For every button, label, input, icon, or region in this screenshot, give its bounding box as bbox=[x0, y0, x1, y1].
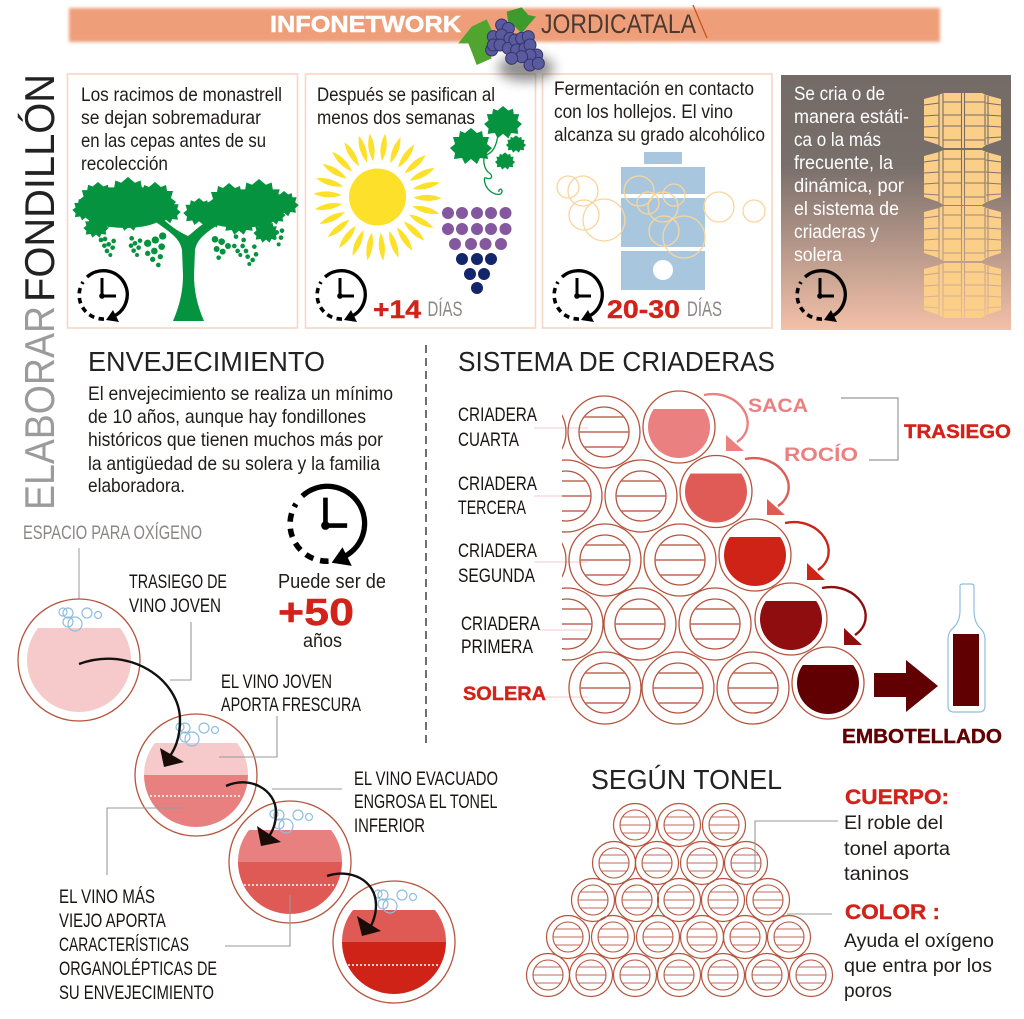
connector lines bbox=[107, 622, 342, 946]
panel: pasificado bbox=[306, 74, 536, 328]
title: Elaborar Fondillón: FONDILLÓN bbox=[16, 74, 63, 302]
labels: criaderas: CRIADERA bbox=[458, 405, 537, 426]
text: racimos: en las cepas antes de su bbox=[81, 130, 266, 152]
labels: saca, rocío bbox=[748, 396, 858, 466]
callout: cuerpo: taninos bbox=[844, 863, 909, 885]
arrow: barrel 3 to 4 bbox=[327, 874, 381, 936]
icon: sun bbox=[313, 133, 442, 261]
label: embotellado: EMBOTELLADO bbox=[842, 726, 1002, 748]
text: fermentación: alcanza su grado alcohólico bbox=[554, 124, 765, 146]
barrel 3 bbox=[229, 801, 351, 923]
text: crianza: dinámica, por bbox=[794, 175, 904, 197]
diagram: trasiego de tonel a tonel bbox=[18, 523, 503, 1004]
section: envejecimiento bbox=[88, 346, 398, 652]
value: +14 días bbox=[373, 296, 462, 324]
value: +14 días: DÍAS bbox=[428, 298, 462, 321]
arrow: saca 1 bbox=[704, 394, 748, 451]
section: según tonel bbox=[526, 764, 999, 1002]
callout: cuerpo: CUERPO: bbox=[845, 786, 949, 809]
brand: InfoNetwork: INFONETWORK bbox=[270, 11, 461, 37]
text: fermentación: Fermentación en contacto bbox=[554, 78, 754, 100]
text: envejecimiento: de 10 años, aunque hay fondillones bbox=[88, 406, 366, 428]
text: envejecimiento: históricos que tienen muchos más por bbox=[88, 429, 383, 451]
empty barrels bbox=[562, 395, 790, 725]
label: vino evacuado: INFERIOR bbox=[354, 816, 425, 837]
wine-filled barrels bbox=[643, 391, 864, 719]
label: vino joven frescura: EL VINO JOVEN bbox=[221, 672, 332, 693]
labels: saca, rocío: SACA bbox=[748, 396, 808, 417]
labels: criaderas: TERCERA bbox=[458, 498, 526, 519]
text: puede ser de +50 años bbox=[278, 571, 386, 652]
barrel 2 bbox=[135, 714, 257, 836]
barrel stack bbox=[526, 804, 832, 996]
labels: criaderas: CRIADERA bbox=[458, 474, 537, 495]
bracket: trasiego: TRASIEGO bbox=[904, 422, 1011, 443]
callout: cuerpo: El roble del bbox=[844, 812, 943, 834]
text: crianza: solera bbox=[794, 244, 842, 266]
icon: clock bbox=[554, 271, 602, 322]
icon: raisin bunch bbox=[442, 207, 512, 294]
text: fermentación: con los hollejos. El vino bbox=[554, 101, 733, 123]
icon: grape cluster bbox=[458, 7, 554, 81]
arrow: saca 4 bbox=[822, 587, 866, 645]
label lines bbox=[534, 428, 590, 697]
section: sistema de criaderas bbox=[458, 346, 1011, 748]
text: crianza: frecuente, la bbox=[794, 152, 893, 174]
label: vino más viejo: SU ENVEJECIMIENTO bbox=[59, 983, 214, 1004]
text: envejecimiento: El envejecimiento se realiza un mínimo bbox=[88, 383, 393, 405]
arrow: saca 2 bbox=[745, 458, 789, 515]
arrow: to bottling bbox=[874, 660, 938, 712]
text: envejecimiento: elaboradora. bbox=[88, 475, 185, 497]
barrel 4 bbox=[333, 881, 455, 1003]
text: puede ser de +50 años: años bbox=[303, 631, 342, 652]
brand: Jordi Catalá: JORDICATALA bbox=[541, 9, 696, 39]
value: 20-30 días: 20-30 bbox=[607, 296, 680, 324]
icon: vine leaves bbox=[450, 106, 526, 194]
label: espacio para oxígeno: ESPACIO PARA OXÍGENO bbox=[23, 523, 202, 544]
heading: según tonel: SEGÚN TONEL bbox=[591, 764, 782, 795]
callout: color: Ayuda el oxígeno bbox=[844, 930, 994, 952]
text: crianza: Se cria o de bbox=[794, 83, 885, 105]
text: crianza: ca o la más bbox=[794, 129, 881, 151]
text: pasificado: menos dos semanas bbox=[317, 107, 475, 129]
icon: clock bbox=[79, 271, 127, 322]
labels: criaderas: SEGUNDA bbox=[458, 566, 535, 587]
bracket: trasiego bbox=[841, 398, 1011, 460]
text: puede ser de +50 años: Puede ser de bbox=[278, 571, 386, 593]
label: vino más viejo: VIEJO APORTA bbox=[59, 911, 166, 932]
label: vino evacuado: ENGROSA EL TONEL bbox=[354, 792, 497, 813]
icon: stacked casks bbox=[924, 93, 1001, 319]
label: vino más viejo: CARACTERÍSTICAS bbox=[59, 935, 189, 956]
labels: criaderas: CRIADERA bbox=[461, 614, 540, 635]
labels: criaderas bbox=[458, 405, 546, 705]
callout: cuerpo: tonel aporta bbox=[844, 838, 950, 860]
text: crianza: manera estáti- bbox=[794, 106, 909, 128]
arrow: barrel 2 to 3 bbox=[226, 782, 281, 846]
title: Elaborar Fondillón: ELABORAR bbox=[16, 306, 63, 510]
heading: envejecimiento: ENVEJECIMIENTO bbox=[88, 346, 325, 377]
text: crianza: criaderas y bbox=[794, 221, 879, 243]
label: vino más viejo: ORGANOLÉPTICAS DE bbox=[59, 959, 217, 980]
label: trasiego de vino joven: VINO JOVEN bbox=[129, 596, 221, 617]
title: Elaborar Fondillón bbox=[16, 74, 63, 510]
labels: criaderas: CRIADERA bbox=[458, 541, 537, 562]
icon: clock bbox=[317, 271, 365, 322]
value: 20-30 días bbox=[607, 296, 722, 324]
labels: criaderas: CUARTA bbox=[458, 430, 519, 451]
text: racimos: Los racimos de monastrell bbox=[81, 84, 282, 106]
label: vino más viejo: EL VINO MÁS bbox=[59, 887, 155, 908]
barrel 1 bbox=[18, 599, 140, 721]
value: +14 días: +14 bbox=[373, 296, 421, 324]
callout: color: COLOR : bbox=[845, 901, 940, 924]
icon: large clock bbox=[290, 486, 365, 566]
arrow: barrel 1 to 2 bbox=[79, 659, 184, 767]
text: racimos: se dejan sobremadurar bbox=[81, 107, 261, 129]
text: racimos: recolección bbox=[81, 153, 168, 175]
icon: bottle bbox=[948, 584, 985, 712]
text: pasificado: Después se pasifican al bbox=[317, 84, 495, 106]
callout: color bbox=[844, 901, 999, 1002]
arrow: saca 3 bbox=[785, 522, 829, 580]
callout: color: poros bbox=[844, 980, 892, 1002]
icon: vine tree bbox=[72, 177, 299, 321]
text: envejecimiento: la antigüedad de su solera y la familia bbox=[88, 453, 380, 475]
value: 20-30 días: DÍAS bbox=[687, 298, 722, 321]
text: crianza: el sistema de bbox=[794, 198, 899, 220]
callout: cuerpo bbox=[844, 786, 955, 885]
callout: color: que entra por los bbox=[844, 955, 992, 977]
text: puede ser de +50 años: +50 bbox=[278, 592, 354, 634]
header band bbox=[69, 5, 940, 42]
label: trasiego de vino joven: TRASIEGO DE bbox=[129, 572, 227, 593]
label: vino evacuado: EL VINO EVACUADO bbox=[354, 769, 498, 790]
panel: fermentación bbox=[542, 74, 772, 328]
icon: fermentation tank bbox=[621, 152, 705, 290]
heading: sistema de criaderas: SISTEMA DE CRIADERAS bbox=[458, 346, 775, 377]
panel: racimos bbox=[68, 74, 299, 328]
labels: criaderas: PRIMERA bbox=[461, 637, 533, 658]
labels: saca, rocío: ROCÍO bbox=[784, 444, 858, 466]
labels: criaderas: SOLERA bbox=[463, 684, 546, 705]
label: vino joven frescura: APORTA FRESCURA bbox=[221, 695, 361, 716]
icon: bubbles bbox=[557, 176, 765, 258]
icon: clock bbox=[797, 271, 845, 322]
panel: crianza bbox=[781, 75, 1011, 330]
